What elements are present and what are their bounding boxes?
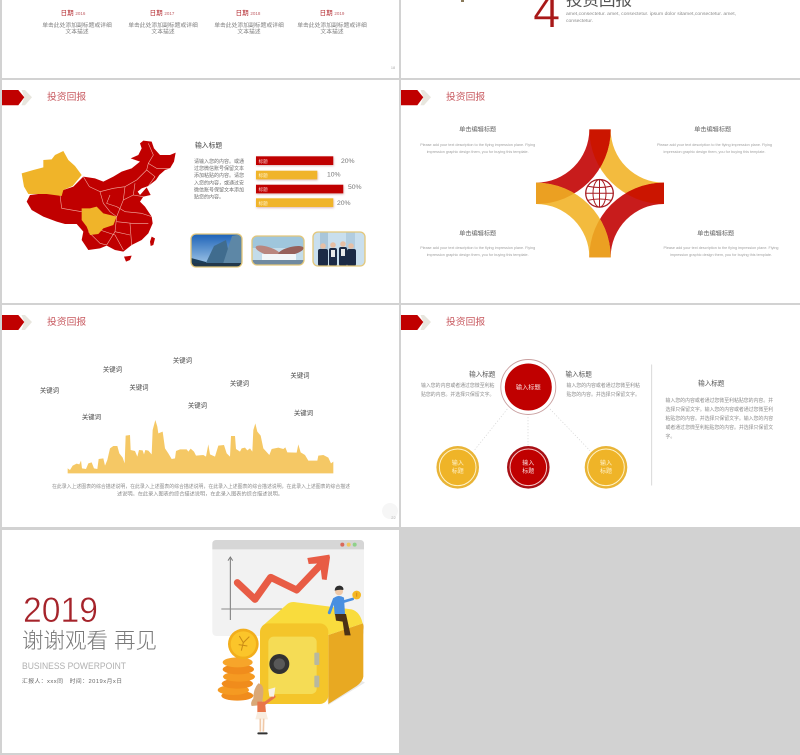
timeline column 2018 [214, 9, 284, 36]
timeline column 2017: 日期 2017 [150, 9, 175, 17]
bar 1: 20%: 20% [341, 158, 355, 165]
keywords: 关键词 [294, 408, 313, 417]
text block: top left: Please add your text description to the flying impression plane. Flying [420, 142, 535, 147]
map text: heading and paragraph: 过您微信账号保留文本 [194, 165, 244, 172]
map of China [22, 141, 176, 262]
panel: four-arc diagram slide [401, 80, 800, 303]
keywords: 关键词 [230, 378, 249, 388]
text block: right of main circle: 贴您的内容。并选择只保留文字。 [566, 391, 640, 398]
coins stack [218, 629, 259, 701]
text block: right column: 选择只保留文字。输入您的内容或者通过您微至利 [666, 406, 773, 413]
bar chart [256, 156, 362, 207]
text block: right column: 或者通过您微至利粘贴您的内容。并选择只保留文 [666, 424, 773, 431]
map text: heading and paragraph: 入您的内容，或通过安 [194, 180, 244, 186]
photo: business team [313, 232, 365, 266]
icon: globe [586, 180, 613, 207]
text block: right column [666, 378, 773, 440]
figure: woman [251, 683, 275, 733]
closing title: 谢谢观看 再见 [22, 629, 157, 653]
keywords [40, 356, 313, 421]
page number: 18 [391, 66, 395, 70]
panel: skyline keywords slide [2, 305, 399, 527]
main circle: 输入标题 [516, 384, 541, 392]
slide header [401, 315, 485, 330]
text block: left of main circle [421, 370, 496, 398]
timeline column 2018: 文本描述 [237, 28, 261, 36]
timeline column 2016: 单击此处添加副标题或详细 [42, 21, 112, 29]
slide header [2, 90, 86, 105]
text block: left of main circle: 输入您的内容或者通过您微至利粘 [421, 382, 494, 389]
keywords: 关键词 [173, 356, 192, 364]
timeline column 2019: 单击此处添加副标题或详细 [297, 21, 367, 29]
four-arc star graphic [536, 129, 664, 257]
bar 2: 10% [256, 171, 341, 179]
circle: center red [507, 446, 550, 489]
timeline column 2017: 单击此处添加副标题或详细 [128, 21, 198, 29]
map text: heading and paragraph: 输入标题 [195, 140, 222, 150]
city skyline silhouette [68, 420, 333, 473]
text block: left of main circle: 输入标题 [469, 370, 496, 379]
timeline column 2016: 文本描述 [65, 28, 89, 36]
photo: city buildings [191, 234, 242, 267]
circle: center red: 标题 [522, 467, 534, 475]
slide header: 投资回报 [446, 90, 485, 103]
circle: left yellow: 标题 [452, 467, 464, 475]
slide header: 投资回报 [47, 315, 86, 328]
timeline column 2018: 单击此处添加副标题或详细 [214, 21, 284, 29]
text block: bottom left: Please add your text description to the flying impression plane. Flying [420, 245, 535, 250]
panel: circle hierarchy slide [401, 305, 800, 527]
safe [260, 602, 365, 705]
text block: top left [420, 126, 535, 154]
text block: right of main circle: 输入您的内容或者通过您微至利粘 [566, 382, 640, 389]
keywords: 关键词 [82, 412, 101, 421]
text block: top left: 单击编辑标题 [459, 126, 496, 134]
keywords: 关键词 [129, 382, 149, 392]
bar 1: 20%: 标题 [258, 158, 268, 165]
timeline column 2018: 日期 2018 [236, 9, 261, 17]
text block: bottom left: 单击编辑标题 [459, 230, 496, 238]
illustration: safe, chart window, coins and figures [212, 540, 365, 733]
timeline column 2016 [42, 9, 112, 36]
keywords: 关键词 [103, 364, 122, 374]
text block: bottom left [420, 230, 535, 257]
timeline column 2019 [297, 9, 367, 36]
text block: bottom left: impression graphic design them, you for buying this template. [427, 252, 529, 257]
skyline description: 述说明。在此录入图表的综合描述说明，在此录入图表的综合描述说明。 [117, 491, 283, 498]
vertical divider [651, 364, 653, 486]
text block: top right [657, 126, 772, 154]
browser window with growth chart [212, 540, 364, 636]
bar 3: 50% [256, 184, 362, 193]
map text: heading and paragraph: 微信账号保留文本添加 [194, 186, 244, 194]
panel: China map slide [2, 80, 399, 303]
timeline column 2016: 日期 2016 [61, 9, 86, 17]
text block: top left: impression graphic design them, you for buying this template. [427, 149, 529, 154]
bar 2: 10%: 标题 [258, 172, 268, 179]
text block: top right: 单击编辑标题 [694, 126, 731, 134]
section description: consectetur. [566, 18, 593, 23]
slide header [2, 315, 86, 330]
figure: man with coin [329, 586, 361, 635]
text block: top right: impression graphic design them, you for buying this template. [664, 149, 766, 154]
skyline description [52, 483, 350, 498]
page number: 22 [391, 515, 396, 520]
bar 4: 20%: 标题 [258, 200, 268, 207]
year: 2019 [23, 591, 98, 630]
dashed connectors [474, 409, 590, 451]
keywords: 关键词 [40, 386, 59, 394]
section description [566, 11, 736, 23]
circle: left yellow: 输入 [452, 459, 464, 467]
slide header: 投资回报 [47, 90, 86, 103]
circle: center red: 输入 [522, 459, 534, 467]
text block: right column: 输入您的内容或者通过您微至利粘贴您的内容。并 [666, 397, 773, 404]
slide header [401, 90, 485, 105]
text block: right column: 字。 [666, 433, 675, 440]
text block: right of main circle [566, 370, 640, 398]
main circle [501, 360, 556, 414]
panel: timeline slide (cropped) [2, 0, 399, 78]
bar 3: 50%: 50% [348, 184, 362, 191]
subtitle: BUSINESS POWERPOINT [22, 661, 126, 671]
photo: handshake [252, 236, 305, 265]
keywords: 关键词 [290, 370, 310, 380]
panel: closing slide [2, 530, 399, 753]
map text: heading and paragraph: 添加粘贴的内容。请您 [194, 172, 244, 179]
circle: right yellow: 标题 [600, 467, 612, 475]
bar 1: 20% [256, 156, 355, 165]
timeline column 2019: 日期 2019 [320, 9, 345, 17]
section description: amet,consectetur. amet, consectetur. ipsum dolor sitamet,consectetur. amet, [566, 11, 736, 16]
circle: left yellow [436, 446, 479, 489]
timeline column 2019: 文本描述 [320, 28, 344, 36]
text block: bottom right: impression graphic design them, you for buying this template. [670, 252, 772, 257]
presenter and date: 汇报人：xxx同 时间：2019x月x日 [22, 677, 122, 685]
circle: right yellow [585, 446, 627, 489]
bar 3: 50%: 标题 [258, 186, 268, 193]
bar 2: 10%: 10% [327, 172, 341, 178]
map text: heading and paragraph: 请输入您的内容。或通 [194, 158, 244, 165]
circle: right yellow: 输入 [600, 459, 612, 467]
text block: bottom right: Please add your text description to the flying impression plane. Flying [664, 245, 778, 250]
skyline description: 在此录入上述图表的综合描述说明，在此录入上述图表的综合描述说明，在此录入上述图表的综合描述说明，在此录入上述图表的综合描述 [52, 483, 350, 490]
slide header: 投资回报 [446, 315, 485, 328]
text block: right column: 输入标题 [698, 378, 725, 388]
text block: bottom right: 单击编辑标题 [697, 230, 734, 238]
decorative mark [461, 0, 464, 2]
bar 4: 20%: 20% [337, 200, 351, 207]
map text: heading and paragraph: 贴您的内容。 [194, 194, 224, 200]
timeline column 2017: 文本描述 [151, 28, 175, 36]
keywords: 关键词 [188, 400, 207, 410]
panel: section four heading (cropped) [401, 0, 800, 78]
text block: left of main circle: 贴您的内容。并选择只保留文字。 [421, 391, 494, 398]
text block: right column: 粘贴您的内容。并选择只保留文字。输入您的内容 [666, 415, 773, 422]
text block: bottom right [664, 230, 778, 257]
page number [382, 503, 398, 520]
text block: top right: Please add your text description to the flying impression plane. Flying [657, 142, 772, 147]
timeline column 2017 [128, 9, 198, 36]
map text: heading and paragraph [194, 140, 244, 200]
text block: right of main circle: 输入标题 [566, 370, 592, 379]
bar 4: 20% [256, 198, 351, 207]
